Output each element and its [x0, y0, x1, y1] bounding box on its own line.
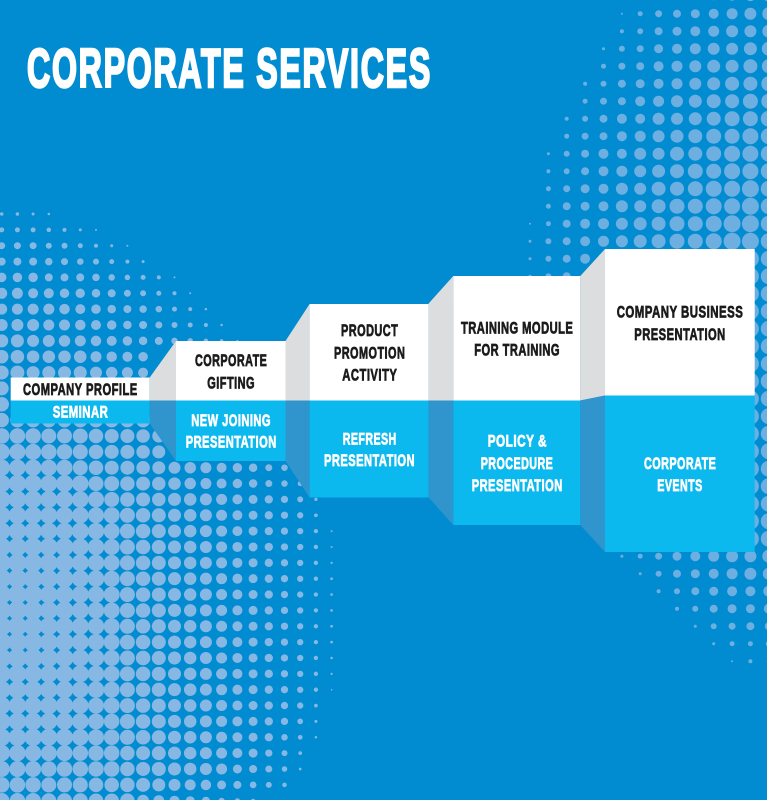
halftone: upper right dots — [530, 0, 767, 662]
title: CORPORATE SERVICES — [27, 37, 432, 99]
label: new joining presentation — [186, 411, 277, 452]
label: refresh presentation: PRESENTATION — [324, 451, 415, 470]
label: corporate gifting: GIFTING — [207, 373, 255, 392]
label: policy and procedure presentation — [472, 432, 563, 495]
step 5: company business presentation / corporate events — [605, 249, 755, 552]
connector: step 2 to 3 — [286, 304, 310, 498]
connector: step 4 to 5 — [580, 249, 605, 552]
label: corporate events: EVENTS — [657, 476, 703, 495]
step 3: product promotion activity / refresh presentation — [310, 304, 429, 498]
label: training module for training: FOR TRAINING — [474, 341, 560, 360]
label: product promotion activity: ACTIVITY — [342, 365, 397, 384]
label: policy and procedure presentation: PRESENTATION — [472, 476, 563, 495]
label: training module for training — [461, 318, 573, 360]
label: corporate events: CORPORATE — [644, 454, 716, 473]
connector: step 3 to 4 — [429, 276, 453, 525]
label: seminar: SEMINAR — [53, 403, 108, 422]
label: policy and procedure presentation: PROCEDURE — [481, 454, 553, 473]
label: training module for training: TRAINING MODULE — [461, 318, 573, 337]
label: product promotion activity: PROMOTION — [334, 343, 405, 362]
step 2: corporate gifting / new joining presentation — [176, 341, 286, 461]
label: company business presentation — [617, 303, 743, 344]
halftone: left dots, upper rows — [2, 214, 238, 420]
label: product promotion activity — [334, 321, 405, 384]
label: product promotion activity: PRODUCT — [341, 321, 398, 340]
step 4: training module / policy and procedure presentation — [453, 276, 580, 525]
label: corporate gifting — [195, 351, 267, 392]
label: refresh presentation — [324, 429, 415, 470]
label: new joining presentation: NEW JOINING — [191, 411, 271, 430]
label: new joining presentation: PRESENTATION — [186, 433, 277, 452]
connector: step 1 to 2 — [150, 341, 176, 461]
label: corporate gifting: CORPORATE — [195, 351, 267, 370]
halftone: left dots, lower columns — [2, 436, 332, 800]
label: refresh presentation: REFRESH — [343, 429, 397, 448]
step 1: company profile / seminar — [11, 378, 150, 424]
label: policy and procedure presentation: POLICY & — [488, 432, 547, 451]
label: company profile: COMPANY PROFILE — [23, 380, 138, 399]
label: corporate events — [644, 454, 716, 495]
